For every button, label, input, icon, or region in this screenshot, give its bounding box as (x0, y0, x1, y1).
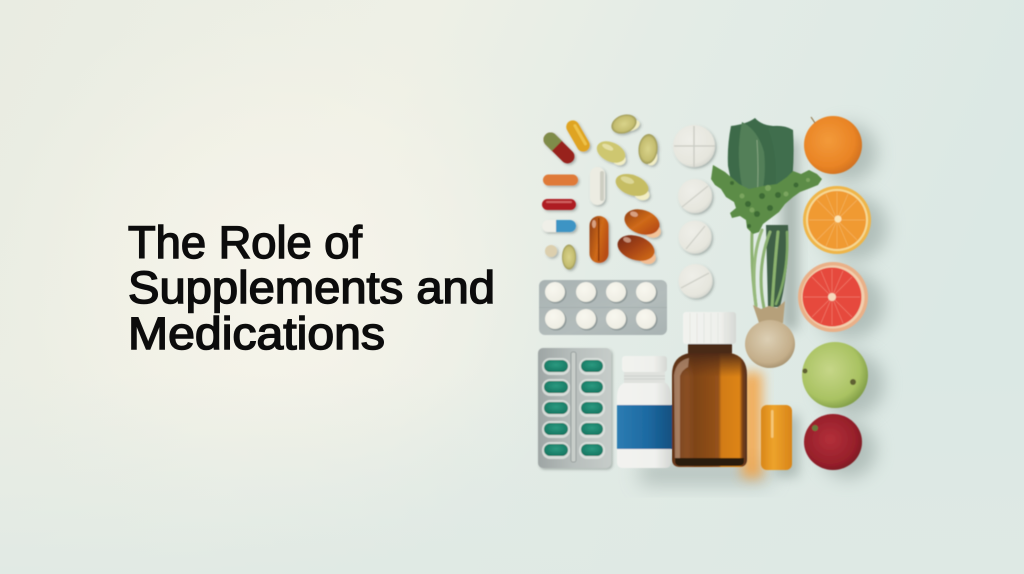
leafy greens (711, 118, 822, 368)
title (128, 217, 495, 359)
capsule: green and red (541, 130, 577, 166)
tablets column (673, 125, 715, 298)
soft shadows and amber glow (640, 124, 887, 484)
fruit: red apple (804, 414, 862, 470)
fruit: whole orange (804, 116, 862, 174)
title: Medications (128, 308, 385, 359)
softgel: right (637, 133, 659, 166)
capsule: orange (543, 174, 578, 186)
capsule: white vertical (590, 167, 605, 205)
softgel: vertical amber (590, 216, 608, 263)
title: The Role of (128, 217, 362, 268)
title: Supplements and (128, 262, 495, 313)
stems shadow (766, 225, 788, 307)
capsule: red (542, 199, 576, 210)
capsule: yellow (564, 118, 592, 154)
tablet: diagonal score 2 (678, 220, 712, 254)
blister pack: green capsules (538, 348, 611, 468)
capsule: white and blue (542, 220, 576, 232)
softgel and capsule group (541, 110, 666, 269)
fruit: grapefruit half (798, 262, 868, 332)
softgel: large yellow (612, 170, 654, 202)
softgel: orange (621, 205, 666, 240)
dark spinach leaves (728, 118, 794, 202)
white supplement bottle with blue label (617, 356, 672, 468)
fruit: green apple (802, 342, 868, 408)
blister pack: white tablets (539, 280, 667, 335)
softgel: top (609, 110, 641, 137)
tablet: cross scored (673, 125, 715, 167)
orange capsule (761, 405, 792, 470)
amber glass bottle (672, 312, 747, 467)
fruit column (798, 116, 871, 470)
softgel: dark amber (614, 231, 661, 266)
small tan tablet (545, 245, 557, 257)
tablet: diagonal score 3 (678, 264, 712, 298)
softgel: middle (593, 137, 630, 168)
root bulb (745, 301, 795, 368)
fruit: orange half (803, 186, 871, 254)
parsley leaves (711, 165, 822, 234)
parsley stems (752, 230, 787, 308)
tablet: diagonal score 1 (678, 179, 712, 213)
softgel: small yellow (562, 244, 576, 270)
